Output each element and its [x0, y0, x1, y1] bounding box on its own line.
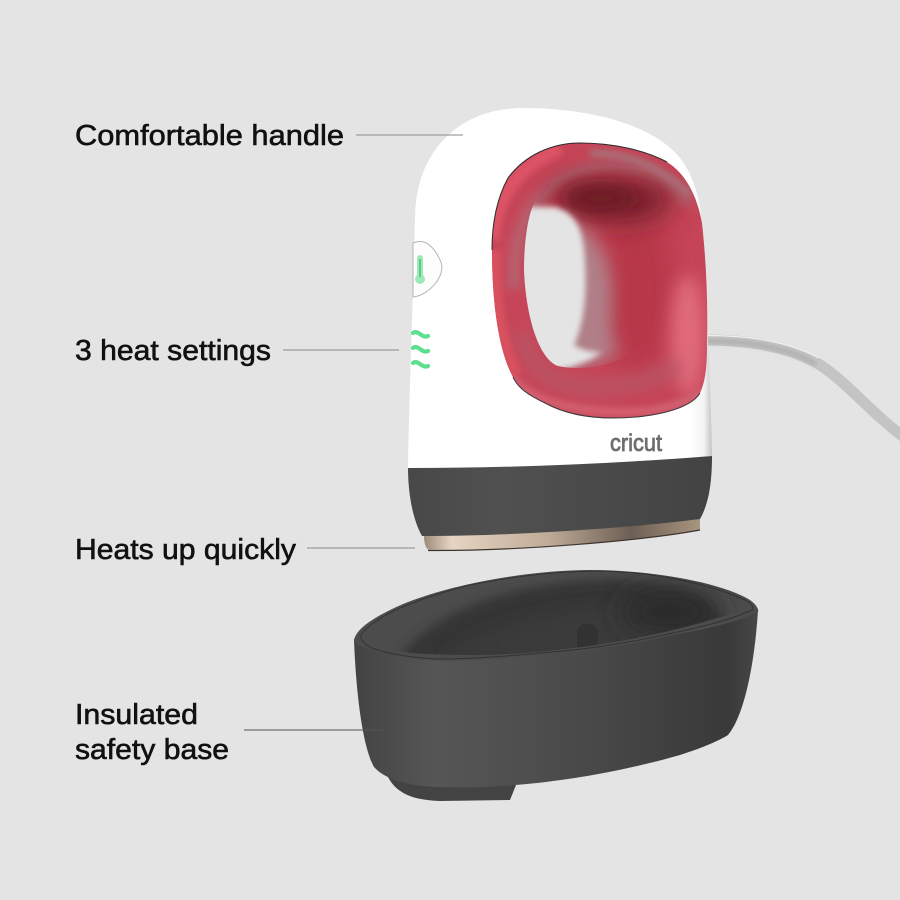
- label: Insulated safety base: [75, 699, 384, 766]
- base interior bowl: [402, 573, 728, 655]
- white shell: [408, 108, 712, 468]
- label: Insulated safety base: Insulated: [75, 699, 198, 731]
- base rim inner lines: [361, 571, 753, 659]
- dark heat band: [408, 456, 712, 536]
- base outer wall: [354, 600, 758, 787]
- brand logo: cricut: [610, 430, 662, 457]
- base rim: [354, 570, 758, 661]
- label: Comfortable handle: Comfortable handle: [75, 120, 344, 152]
- insulated safety base: [354, 570, 758, 801]
- base peg: [577, 624, 598, 647]
- icon: heat setting waves: [413, 332, 428, 367]
- label: Heats up quickly: Heats up quickly: [75, 534, 297, 566]
- base foot: [387, 775, 516, 801]
- iron: EasyPress Mini: [408, 108, 715, 551]
- icon: thermometer: [415, 255, 425, 284]
- red handle grip: [492, 144, 708, 418]
- power cord: [705, 336, 900, 438]
- window: crisp left edge, soft fade into grip on the right: [515, 207, 620, 374]
- red grip outline: [492, 143, 667, 250]
- grip soft inner band: [514, 166, 690, 290]
- heat button: [413, 242, 442, 297]
- label: Insulated safety base: safety base: [75, 734, 229, 766]
- label: 3 heat settings: 3 heat settings: [75, 335, 271, 367]
- soleplate: [424, 517, 700, 551]
